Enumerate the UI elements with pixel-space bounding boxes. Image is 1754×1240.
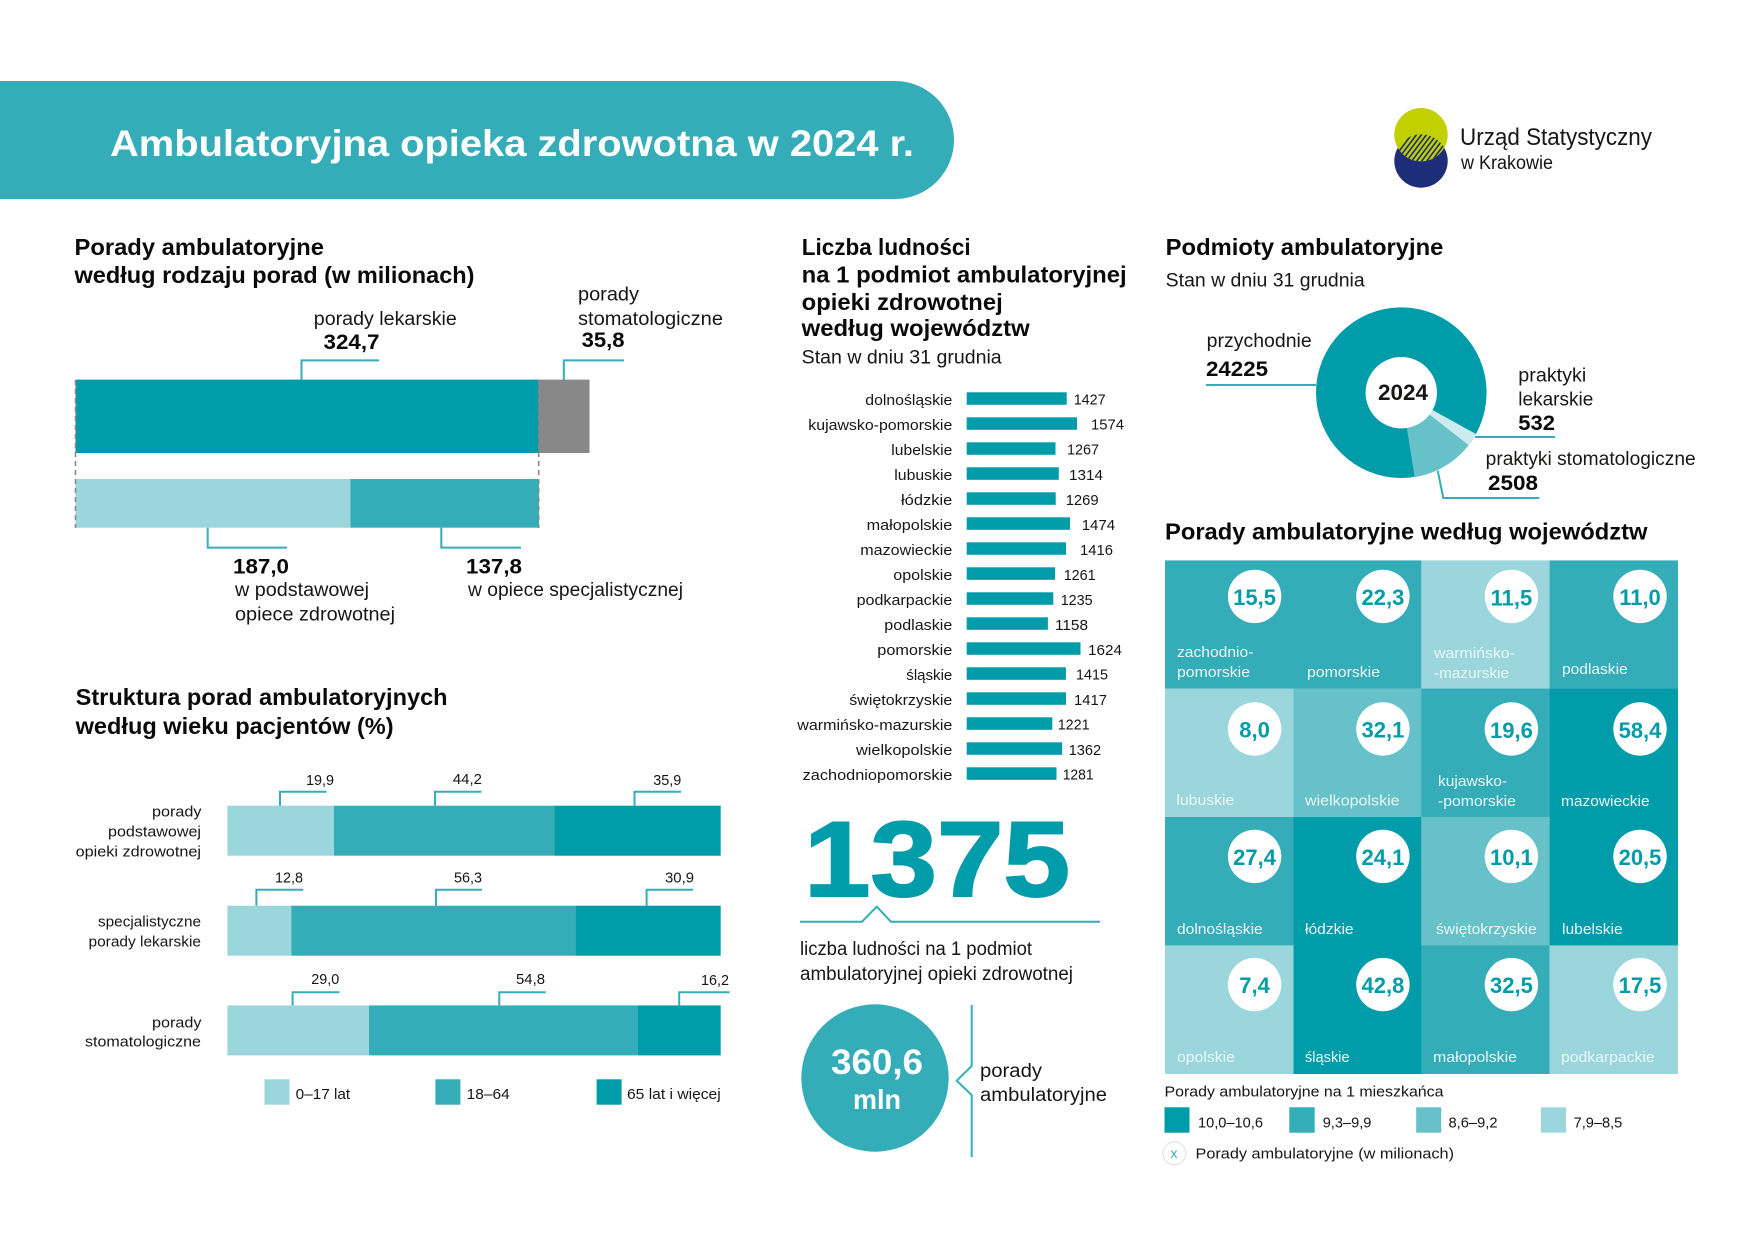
tile grid: voivodeships: 27,4 [1233,845,1277,870]
callout: 187,0 primary care: opiece zdrowotnej [235,605,395,626]
bar chart: population per entity: lubelskie [891,442,952,459]
tile grid: voivodeships: 20,5 [1619,845,1661,870]
bar chart: population per entity: 1269 [1066,492,1099,509]
bar chart: population per entity: 1574 [1091,416,1124,434]
stacked bar: dental advice: 54,8 [516,971,545,988]
stacked bar: dental advice [85,971,730,1055]
logo: Urząd Statystyczny w Krakowie [1380,108,1652,188]
stacked bar: specialist advice: specjalistyczne [98,914,201,931]
bar chart: population per entity: 1158 [1055,617,1088,634]
stacked bar: primary care: porady [152,804,202,821]
bar chart: population per entity: 1417 [1074,692,1107,709]
tile grid: voivodeships: lubuskie [1176,792,1234,809]
panel: structure by patient age [75,684,730,1105]
bar chart: population per entity: 1427 [1074,392,1106,408]
bar chart: population per entity: zachodniopomorskie [803,767,952,784]
callout: porady lekarskie 324,7: porady lekarskie [314,309,457,330]
tile grid: voivodeships: kujawsko- [1438,773,1507,790]
tile grid: voivodeships: 7,4 [1239,973,1271,998]
tile grid: voivodeships: mazowieckie [1561,793,1650,810]
callout circle: 360,6 mln advice [801,1004,1107,1157]
big number: 1375: 1375 [804,799,1070,919]
legend: age groups: 0–17 lat [296,1086,351,1103]
tile grid: voivodeships: 15,5 [1233,585,1276,610]
bar chart: population per entity: warmińsko-mazurskie [796,717,952,734]
bar chart: population per entity: 1415 [1076,666,1108,684]
tile grid: voivodeships: 19,6 [1490,718,1533,743]
tile grid: voivodeships: podlaskie [1562,661,1628,678]
bar chart: population per entity: świętokrzyskie [849,692,952,709]
heading: population per entity: na 1 podmiot ambulatoryjnej [802,262,1127,288]
tile grid: voivodeships: pomorskie [1177,664,1250,681]
donut chart: 2024 [1378,380,1428,405]
tile grid: voivodeships: lubelskie [1562,921,1623,938]
stacked bar: dental advice: stomatologiczne [85,1034,201,1051]
callout: 187,0 primary care: w podstawowej [234,580,369,601]
title banner [0,81,954,199]
bar chart: population per entity: 1281 [1063,766,1094,784]
callout: praktyki stomatologiczne [1438,449,1696,498]
bar chart: population per entity: dolnośląskie [865,392,952,409]
bar chart: population per entity [796,392,1124,784]
stacked bar: dental advice: 29,0 [311,971,339,988]
callout: porady stomatologiczne 35,8: 35,8 [582,329,625,352]
bar chart: population per entity: 1221 [1058,716,1090,734]
callout: porady stomatologiczne 35,8: stomatologiczne [578,309,723,330]
tile grid: voivodeships: 22,3 [1361,585,1404,610]
tile grid: voivodeships: pomorskie [1307,664,1380,681]
callout: porady lekarskie 324,7 [302,309,457,380]
tile grid: voivodeships: łódzkie [1305,921,1354,938]
panel: population per entity by voivodeship [796,234,1127,1157]
tile grid: voivodeships: 32,5 [1490,973,1533,998]
tile grid: voivodeships: 11,0 [1619,585,1661,610]
stacked bar: specialist advice: 12,8 [275,869,303,886]
legend: age groups [264,1079,721,1105]
tile grid: voivodeships: zachodnio- [1177,644,1253,661]
big number: 1375 [800,799,1100,985]
callout circle: 360,6 mln advice: porady [980,1061,1043,1082]
stacked bar: specialist advice [88,869,721,956]
tile grid: voivodeships [1165,560,1678,1074]
donut chart [1316,307,1487,478]
stacked bar: specialist advice: 30,9 [665,869,694,886]
bar chart: population per entity: łódzkie [901,492,952,509]
heading: advice by type: Porady ambulatoryjne [74,234,324,260]
legend: advice per resident: 10,0–10,6 [1198,1114,1263,1131]
logo: Urząd Statystyczny w Krakowie: Urząd Statystyczny [1460,124,1652,151]
callout: 187,0 primary care [208,528,395,626]
tile grid: voivodeships: warmińsko- [1433,645,1515,662]
callout: praktyki stomatologiczne: praktyki stomatologiczne [1486,449,1696,470]
stacked bar: primary care: 44,2 [453,771,482,788]
legend: advice per resident: 8,6–9,2 [1448,1114,1498,1131]
callout: praktyki stomatologiczne: 2508 [1488,472,1538,495]
tile grid: voivodeships: opolskie [1177,1049,1235,1066]
tile grid: voivodeships: podkarpackie [1561,1049,1655,1066]
tile grid: voivodeships: świętokrzyskie [1436,921,1537,938]
stacked bar: medical and dental advice [76,380,590,453]
bar chart: population per entity: mazowieckie [860,542,952,559]
heading: population per entity [801,234,1127,368]
tile grid: voivodeships: 8,0 [1239,718,1270,742]
title banner: Ambulatoryjna opieka zdrowotna w 2024 r. [110,123,914,164]
callout: praktyki lekarskie: praktyki [1518,366,1586,387]
heading: population per entity: opieki zdrowotnej [802,289,1003,315]
stacked bar: specialist advice: 56,3 [454,869,482,886]
callout: porady stomatologiczne 35,8 [564,284,723,380]
callout: 187,0 primary care: 187,0 [233,556,289,579]
logo: Urząd Statystyczny w Krakowie: w Krakowie [1460,153,1553,174]
stacked bar: primary care: opieki zdrowotnej [76,844,201,861]
callout: przychodnie [1206,331,1316,385]
bar chart: population per entity: podkarpackie [857,592,952,609]
bar chart: population per entity: 1624 [1088,642,1122,659]
bar chart: population per entity: podlaskie [884,617,952,634]
tile grid: voivodeships: 10,1 [1490,845,1533,870]
heading: advice by type: według rodzaju porad (w milionach) [73,262,474,288]
callout: przychodnie: przychodnie [1207,331,1312,352]
stacked bar: dental advice: 16,2 [701,972,729,989]
bar chart: population per entity: 1267 [1067,442,1099,458]
tile grid: voivodeships: -pomorskie [1438,793,1516,810]
stacked bar: primary and specialist care [76,479,539,528]
bar chart: population per entity: małopolskie [867,517,952,534]
tile grid: voivodeships: śląskie [1305,1049,1350,1066]
callout: 137,8 specialist care [441,528,683,601]
bar chart: population per entity: 1235 [1061,592,1093,609]
callout circle: 360,6 mln advice: ambulatoryjne [980,1085,1107,1106]
callout: praktyki lekarskie [1475,366,1593,437]
stacked bar: dental advice: porady [152,1015,202,1032]
bar chart: population per entity: 1261 [1064,567,1096,584]
legend: advice per resident: 7,9–8,5 [1574,1114,1622,1131]
panel: advice by voivodeship [1163,518,1678,1165]
bar chart: population per entity: 1314 [1069,467,1103,484]
big number: 1375: liczba ludności na 1 podmiot [800,939,1033,960]
callout: przychodnie: 24225 [1206,358,1268,381]
heading: outpatient entities [1166,234,1443,292]
bar chart: population per entity: 1416 [1080,542,1113,559]
heading: structure by age [75,684,448,739]
panel: outpatient entities [1166,234,1696,498]
heading: structure by age: Struktura porad ambulatoryjnych [76,684,448,710]
bar chart: population per entity: opolskie [893,567,952,584]
panel: advice by type [73,234,723,626]
heading: outpatient entities: Stan w dniu 31 grudnia [1166,271,1365,292]
tile grid: voivodeships: -mazurskie [1434,665,1509,682]
legend: advice per resident: 9,3–9,9 [1323,1114,1371,1131]
legend: advice per resident [1163,1084,1622,1165]
tile grid: voivodeships: wielkopolskie [1304,793,1400,810]
tile grid: voivodeships: 17,5 [1619,973,1661,998]
callout: porady stomatologiczne 35,8: porady [578,284,640,305]
callout: 137,8 specialist care: 137,8 [466,556,522,579]
bar chart: population per entity: kujawsko-pomorskie [808,417,952,434]
tile grid: voivodeships: 11,5 [1491,586,1532,610]
callout: praktyki lekarskie: lekarskie [1518,390,1593,411]
callout circle: 360,6 mln advice: 360,6 [831,1043,923,1082]
bar chart: population per entity: 1362 [1069,742,1101,759]
tile grid: voivodeships: 42,8 [1361,973,1404,998]
bar chart: population per entity: wielkopolskie [855,742,952,759]
bar chart: population per entity: lubuskie [894,467,952,484]
bar chart: population per entity: pomorskie [877,642,952,659]
tile grid: voivodeships: 32,1 [1361,718,1404,742]
tile grid: voivodeships: 24,1 [1361,845,1404,870]
legend: advice per resident: Porady ambulatoryjne na 1 mieszkańca [1164,1084,1444,1101]
bar chart: population per entity: 1474 [1082,517,1115,534]
tile grid: voivodeships: małopolskie [1433,1049,1517,1066]
heading: advice by voivodeship: Porady ambulatoryjne według województw [1165,518,1648,544]
heading: population per entity: Stan w dniu 31 grudnia [802,347,1002,368]
legend: advice per resident: Porady ambulatoryjne (w milionach) [1196,1145,1454,1162]
tile grid: voivodeships: dolnośląskie [1177,921,1263,938]
stacked bar: primary care: 35,9 [653,772,681,789]
legend: age groups: 18–64 [467,1086,510,1103]
callout: praktyki lekarskie: 532 [1518,412,1555,435]
heading: population per entity: Liczba ludności [802,234,971,260]
legend: advice per resident: x [1170,1145,1178,1161]
big number: 1375: ambulatoryjnej opieki zdrowotnej [800,964,1073,985]
callout: 137,8 specialist care: w opiece specjalistycznej [467,580,683,601]
callout circle: 360,6 mln advice: mln [853,1084,901,1115]
tile grid: voivodeships: 58,4 [1619,718,1662,743]
heading: population per entity: według województw [801,315,1030,341]
legend: age groups: 65 lat i więcej [627,1086,721,1103]
heading: advice by type [73,234,474,288]
stacked bar: primary care [76,771,721,861]
bar chart: population per entity: śląskie [906,667,952,684]
callout: porady lekarskie 324,7: 324,7 [324,331,380,354]
stacked bar: specialist advice: porady lekarskie [88,934,201,951]
heading: outpatient entities: Podmioty ambulatoryjne [1166,234,1443,260]
stacked bar: primary care: podstawowej [108,824,201,841]
stacked bar: primary care: 19,9 [306,772,334,789]
heading: structure by age: według wieku pacjentów (%) [75,713,394,739]
